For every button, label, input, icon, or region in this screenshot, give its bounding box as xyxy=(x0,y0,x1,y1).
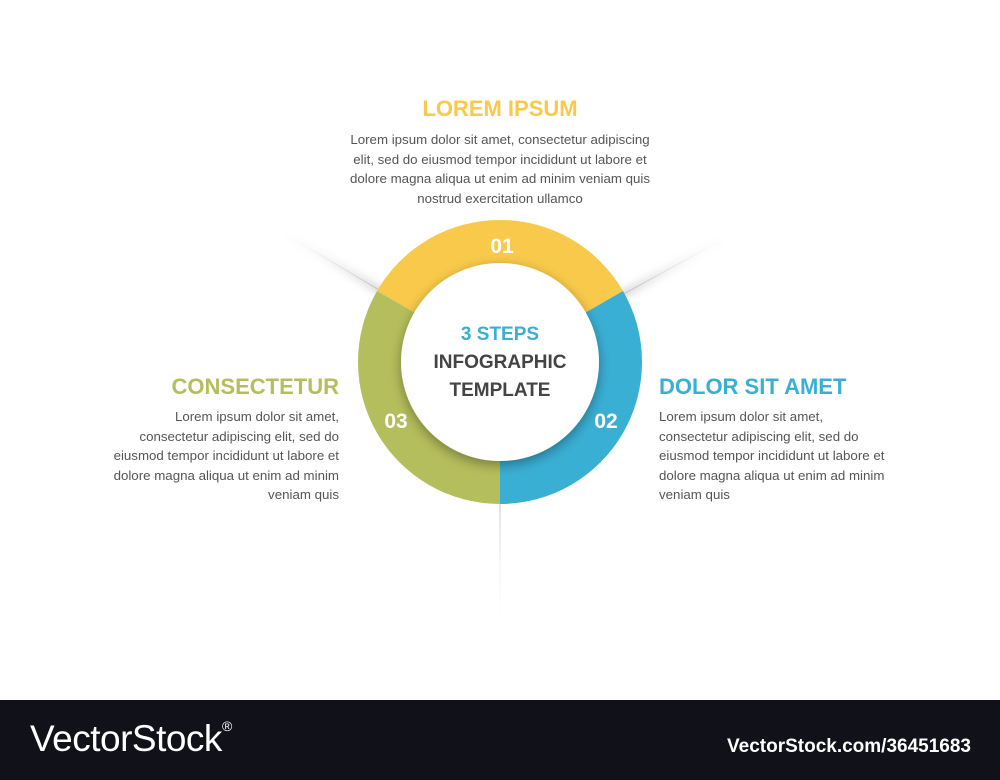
heading: lorem ipsum: LOREM IPSUM xyxy=(422,96,578,121)
text: step 01: Lorem ipsum dolor sit amet, consectetur adipiscing xyxy=(350,132,650,147)
segment 01 yellow xyxy=(377,220,623,362)
divider lines xyxy=(270,225,740,635)
center circle: 3 STEPS xyxy=(461,324,539,345)
segment 02 blue: 02 xyxy=(594,410,618,433)
text: step 01: elit, sed do eiusmod tempor incididunt ut labore et xyxy=(353,152,647,166)
footer logo: VectorStock® xyxy=(30,718,232,759)
text: step 01 xyxy=(350,132,650,206)
text: step 03 xyxy=(114,409,339,502)
text: step 02: veniam quis xyxy=(659,487,730,502)
center circle: TEMPLATE xyxy=(450,380,550,401)
text: step 02: consectetur adipiscing elit, sed do xyxy=(659,428,859,444)
text: step 03: eiusmod tempor incididunt ut labore et xyxy=(114,448,339,463)
text: step 01: nostrud exercitation ullamco xyxy=(417,190,583,206)
text: step 02: Lorem ipsum dolor sit amet, xyxy=(659,409,823,424)
segment 03 green xyxy=(358,291,500,504)
segment 01 yellow: 01 xyxy=(490,235,514,258)
heading: dolor sit amet: DOLOR SIT AMET xyxy=(659,374,846,399)
text: step 02 xyxy=(659,409,884,502)
text: step 03: Lorem ipsum dolor sit amet, xyxy=(175,409,339,424)
footer bar xyxy=(0,700,1000,780)
heading: consectetur: CONSECTETUR xyxy=(172,374,339,399)
text: step 02: eiusmod tempor incididunt ut labore et xyxy=(659,448,884,463)
text: step 03: dolore magna aliqua ut enim ad minim xyxy=(114,468,339,482)
center circle xyxy=(401,263,599,461)
footer url: VectorStock.com/36451683 xyxy=(727,736,971,757)
text: step 03: veniam quis xyxy=(268,487,339,502)
segment 03 green: 03 xyxy=(384,410,408,433)
text: step 01: dolore magna aliqua ut enim ad minim veniam quis xyxy=(350,171,650,186)
center circle: INFOGRAPHIC xyxy=(434,352,567,373)
segment 02 blue xyxy=(500,291,642,504)
text: step 03: consectetur adipiscing elit, sed do xyxy=(139,428,339,444)
text: step 02: dolore magna aliqua ut enim ad minim xyxy=(659,468,884,482)
